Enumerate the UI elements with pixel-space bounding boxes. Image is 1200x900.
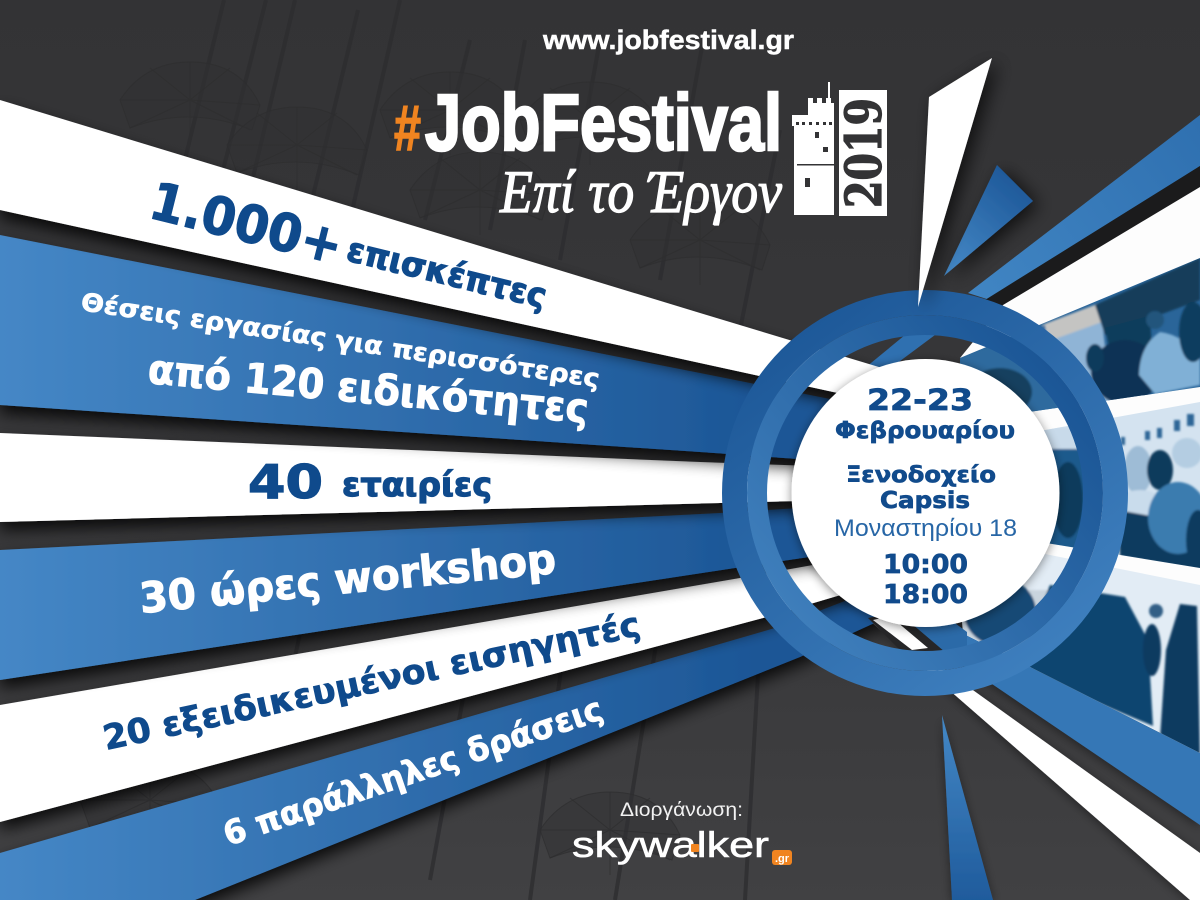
ray: blue upper right [968, 115, 1200, 300]
text: job positions line 1: Θέσεις εργασίας για περισσότερες [79, 287, 602, 393]
ray: annulus lower fragments [868, 600, 967, 655]
text: 6 parallel actions: 6 παράλληλες δράσεις [218, 689, 608, 854]
text: 1000+ visitors [144, 171, 551, 317]
text: 30 hours workshop: 30 ώρες workshop [137, 534, 558, 623]
photo: bottom standing crowd [950, 550, 1200, 760]
text: dates and venue: Μοναστηρίου 18 [834, 515, 1017, 542]
text: 40 companies: εταιρίες [342, 465, 492, 504]
text: 1000+ visitors: 1.000+ [144, 171, 349, 277]
icon: blue spike bottom [942, 715, 993, 900]
ray: white and photo backing [960, 187, 1200, 753]
icon: blue triangle [944, 165, 1033, 276]
band: white 20 speakers [0, 545, 925, 822]
white date disc [792, 359, 1060, 627]
badge: 2019: 2019 [834, 98, 893, 208]
band: white visitors [0, 100, 925, 412]
ray: white lower right [870, 621, 1200, 900]
text: 40 companies [248, 455, 492, 509]
panel: right rays [870, 115, 1200, 900]
icon: white spike [918, 58, 992, 307]
photo: top crowd at a stand [960, 258, 1200, 412]
title: JobFestival: JobFestival [425, 78, 782, 167]
title: JobFestival: # [394, 92, 421, 164]
text: 1000+ visitors: επισκέπτες [343, 230, 551, 317]
inner ring [747, 315, 1103, 671]
ray: blue lower right [940, 632, 1200, 825]
logo: skywalker: skywalker [572, 824, 769, 865]
text: dates and venue: Φεβρουαρίου [835, 418, 1015, 444]
panel: central ring [722, 290, 1128, 696]
band: blue job positions [0, 235, 925, 468]
text: organiser label: Διοργάνωση: [620, 800, 743, 821]
text: dates and venue: 22-23 [867, 383, 973, 417]
icon: White Tower [792, 82, 834, 215]
subtitle: Epi to Ergon: Επί το Έργον [499, 159, 782, 225]
text: dates and venue: Capsis [880, 488, 970, 514]
text: 20 specialist speakers: 20 εξειδικευμένοι εισηγητές [100, 605, 644, 759]
logo: skywalker: .gr [775, 853, 790, 865]
text: dates and venue [834, 383, 1017, 610]
ray: black upper right [985, 166, 1200, 315]
outer ring [722, 290, 1128, 696]
panel: photos [950, 250, 1200, 760]
band: white 40 companies [0, 433, 925, 522]
text: 40 companies: 40 [248, 455, 323, 509]
text: dates and venue: 18:00 [883, 580, 968, 610]
ray: blue wedge in upper annulus [860, 335, 935, 376]
text: website: www.jobfestival.gr [542, 25, 795, 55]
text: dates and venue: 10:00 [883, 550, 968, 580]
band: blue 30 hours workshop [0, 500, 925, 680]
band: blue 6 parallel actions [0, 570, 925, 900]
photo: middle seated visitors [1044, 402, 1200, 568]
text: job positions line 2: από 120 ειδικότητες [146, 345, 591, 433]
text: dates and venue: Ξενοδοχείο [846, 463, 996, 488]
